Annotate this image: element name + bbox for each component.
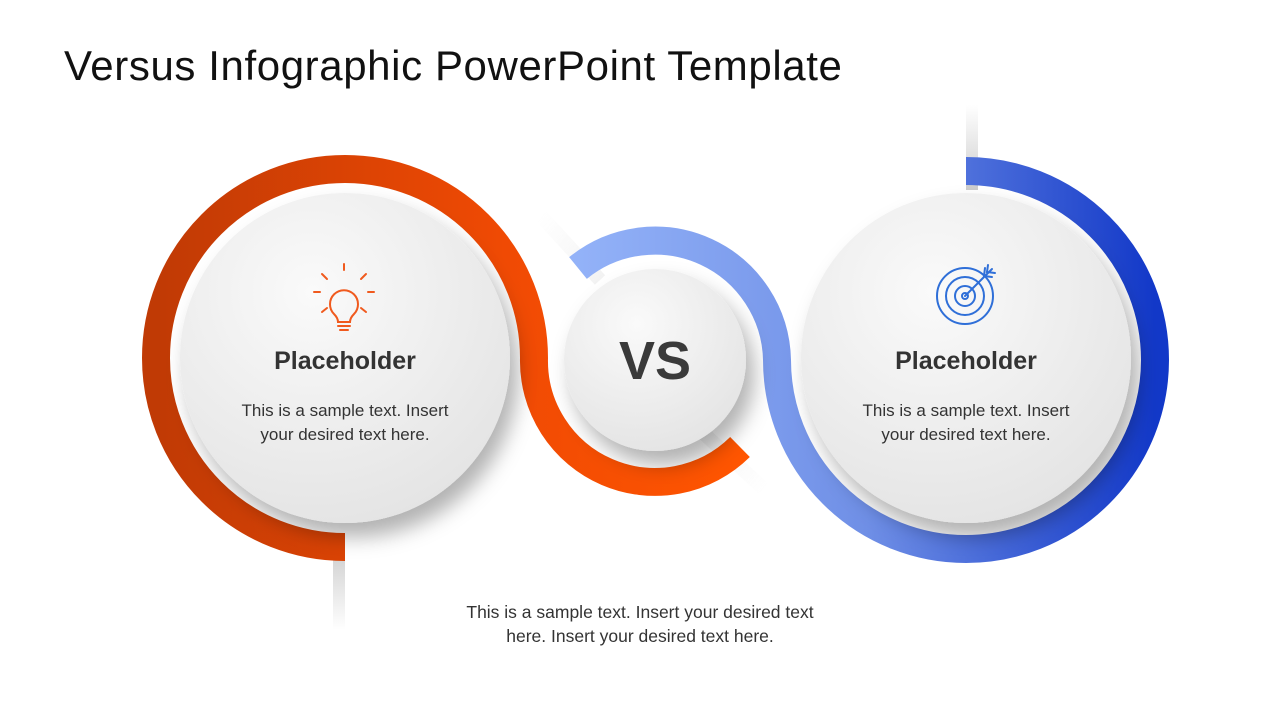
right heading: Placeholder — [895, 347, 1037, 375]
right text: This is a sample text. Insert — [863, 401, 1069, 420]
title: Versus Infographic PowerPoint Template — [64, 42, 842, 89]
orange ring curve — [156, 169, 740, 547]
left circle — [180, 193, 510, 523]
bottom text: here. Insert your desired text here. — [506, 626, 774, 646]
decorative diagonal shadows — [540, 215, 765, 490]
VS text: VS — [619, 331, 691, 391]
vs circle — [564, 269, 746, 451]
left text — [242, 401, 448, 444]
icon: lightbulb — [314, 264, 374, 330]
bottom text — [466, 602, 814, 646]
left text: your desired text here. — [260, 425, 430, 444]
bottom text: This is a sample text. Insert your desired text — [466, 602, 814, 622]
blue ring curve — [578, 171, 1155, 549]
icon: target — [937, 265, 995, 324]
left text: This is a sample text. Insert — [242, 401, 448, 420]
right circle — [801, 193, 1131, 523]
left heading: Placeholder — [274, 347, 416, 375]
right text — [862, 401, 1070, 444]
right text: your desired text here. — [881, 425, 1051, 444]
